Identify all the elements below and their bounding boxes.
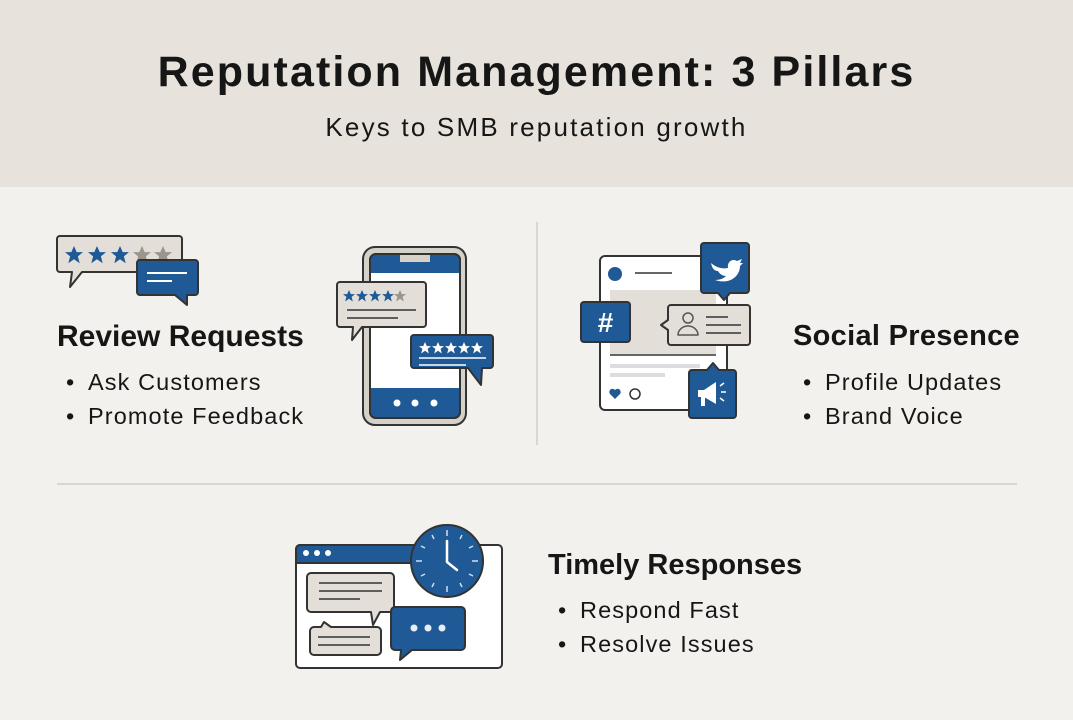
- bullets: review requests: [66, 369, 304, 429]
- bullets: review requests: •: [66, 403, 75, 429]
- bullets: timely responses: Resolve Issues: [580, 631, 755, 657]
- header band: [0, 0, 1073, 187]
- title: Reputation Management: 3 Pillars: [158, 48, 915, 96]
- icon: review bubbles: [57, 236, 198, 305]
- heading: social presence: Social Presence: [793, 320, 1020, 352]
- bullets: social presence: •: [803, 369, 812, 395]
- bullets: review requests: Ask Customers: [88, 369, 262, 395]
- heading: timely responses: Timely Responses: [548, 549, 802, 581]
- icon: social post: [581, 243, 750, 418]
- bullets: social presence: Profile Updates: [825, 369, 1002, 395]
- bullets: review requests: •: [66, 369, 75, 395]
- icon: phone with reviews: [337, 247, 493, 425]
- heading: review requests: Review Requests: [57, 320, 304, 353]
- bullets: review requests: Promote Feedback: [88, 403, 304, 429]
- bullets: timely responses: Respond Fast: [580, 597, 740, 623]
- bullets: timely responses: •: [558, 631, 567, 657]
- bullets: social presence: [803, 369, 1002, 429]
- icon: chat window with clock: [296, 525, 502, 668]
- bullets: social presence: •: [803, 403, 812, 429]
- bullets: timely responses: •: [558, 597, 567, 623]
- bullets: social presence: Brand Voice: [825, 403, 964, 429]
- icon: social post: #: [598, 307, 614, 338]
- bullets: timely responses: [558, 597, 755, 657]
- subtitle: Keys to SMB reputation growth: [325, 112, 748, 142]
